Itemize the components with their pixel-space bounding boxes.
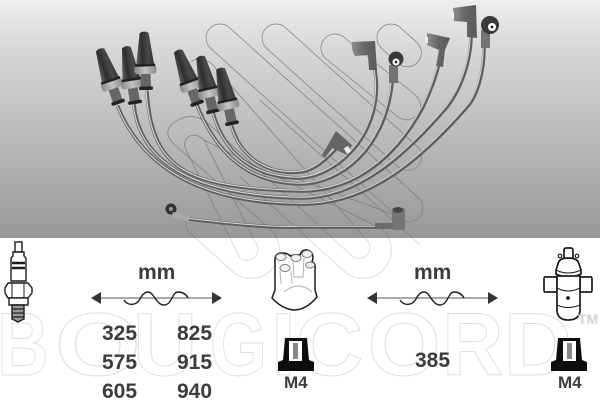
boot 3 — [425, 33, 450, 67]
lengths list left: 915 — [177, 351, 212, 374]
ignition wires — [117, 37, 484, 227]
BOUGICORD watermark: D — [504, 295, 572, 394]
BOUGICORD watermark: O — [55, 295, 141, 395]
photo panel background — [0, 0, 600, 238]
angled coil and distributor boots — [166, 5, 499, 230]
icon: spark plug — [5, 242, 32, 322]
boot 2 — [388, 52, 404, 83]
boot 5 — [481, 16, 499, 48]
icon: ignition coil — [544, 248, 592, 320]
watermark pattern lines — [168, 18, 429, 278]
M4 label right: M4 — [558, 373, 582, 392]
mm label left: mm — [138, 261, 175, 284]
wavy length arrow right — [367, 292, 498, 305]
lengths list left: 325 — [102, 322, 137, 345]
trademark mark: TM — [578, 311, 598, 327]
icon: M4 connector right — [551, 338, 587, 371]
BOUGICORD watermark: C — [296, 295, 363, 395]
mm label right: mm — [414, 261, 451, 284]
length value right: 385 — [415, 349, 450, 372]
BOUGICORD watermark: R — [442, 295, 503, 394]
icon: distributor cap — [272, 250, 317, 310]
lengths list left: 575 — [102, 351, 137, 374]
spark plug boots — [89, 31, 243, 127]
boot 4 — [451, 5, 477, 38]
M4 label centre: M4 — [284, 373, 308, 392]
BOUGICORD watermark: I — [271, 294, 296, 394]
BOUGICORD watermark: G — [210, 296, 267, 395]
boot 1 — [352, 41, 377, 70]
BOUGICORD watermark — [0, 294, 572, 395]
lengths list left: 825 — [177, 322, 212, 345]
BOUGICORD watermark: O — [368, 295, 440, 395]
bottom lead right terminal — [375, 207, 405, 230]
boot 6 — [322, 131, 352, 158]
lengths list left — [102, 322, 212, 400]
bottom lead left terminal — [166, 204, 190, 221]
icon: M4 connector centre — [278, 338, 314, 371]
BOUGICORD watermark: U — [133, 294, 197, 394]
wavy length arrow left — [91, 292, 222, 305]
